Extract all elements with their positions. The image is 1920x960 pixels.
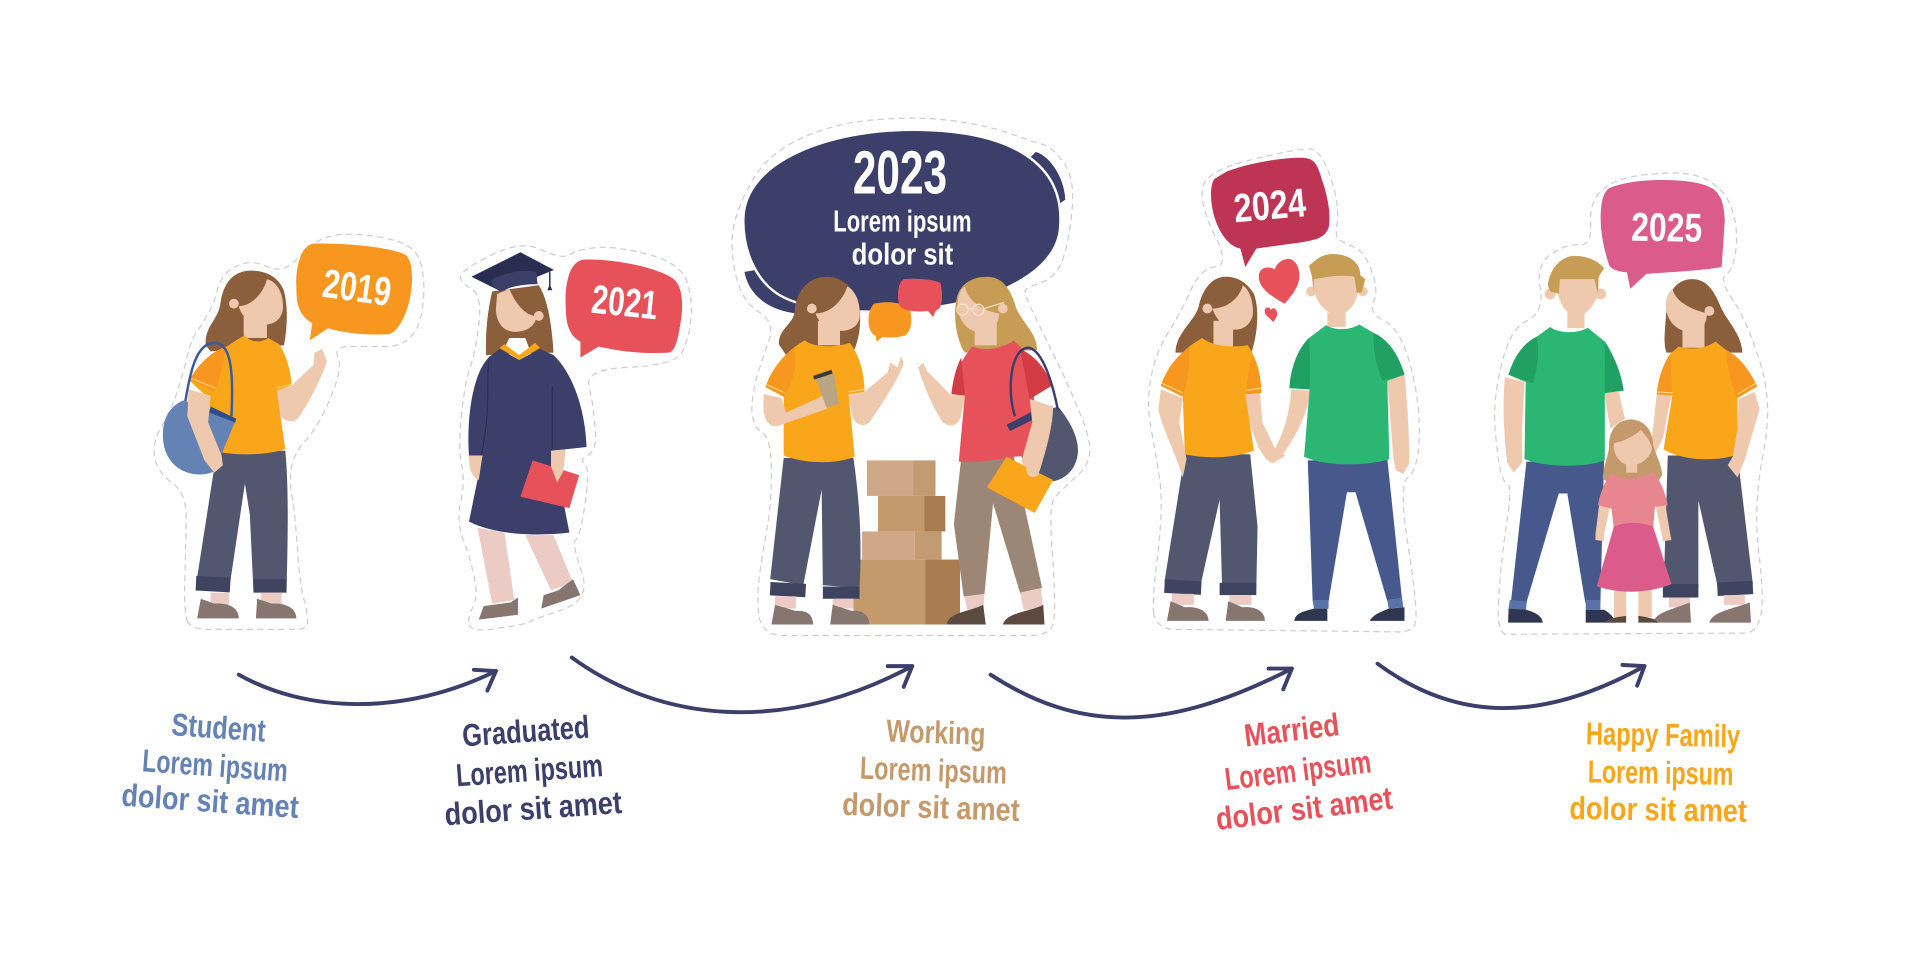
panel: 2021 graduated — [459, 246, 691, 630]
text block: happy family: dolor sit amet — [1569, 790, 1748, 829]
text block: student: Student — [170, 706, 267, 749]
text block: student: Lorem ipsum — [141, 742, 289, 788]
text block: married: Lorem ipsum — [1223, 743, 1373, 797]
text block: married: Married — [1242, 706, 1341, 754]
panel: 2024 married — [1149, 149, 1419, 632]
arrow: working to married — [991, 669, 1292, 718]
sticker outline — [154, 234, 424, 629]
graduation cap — [471, 252, 554, 291]
text block: graduated: Lorem ipsum — [455, 747, 604, 793]
arrow: student to graduated — [239, 670, 496, 704]
panel: 2019 student — [154, 234, 424, 629]
sticker outline — [459, 246, 691, 630]
text block: married: dolor sit amet — [1214, 780, 1395, 837]
speech bubble: 2023: dolor sit — [852, 237, 953, 271]
speech bubble: 2023: Lorem ipsum — [833, 204, 972, 238]
figure: daughter in pink dress — [1596, 419, 1671, 623]
text block: happy family: Happy Family — [1586, 715, 1741, 754]
stacked cardboard boxes — [853, 460, 960, 624]
figure: woman with coffee — [763, 277, 904, 624]
icon: hearts — [1259, 259, 1299, 322]
figure: mother — [1652, 279, 1760, 623]
text block: working: Lorem ipsum — [859, 750, 1007, 791]
text block: happy family — [1569, 715, 1748, 829]
figure: graduate in gown — [468, 252, 587, 620]
speech bubble: 2023 — [743, 130, 1065, 313]
arrow: married to happy family — [1378, 664, 1644, 708]
speech bubble: 2021: 2021 — [589, 276, 660, 328]
speech bubble: 2019: 2019 — [320, 260, 394, 315]
text block: graduated: Graduated — [461, 709, 591, 753]
arrow: graduated to working — [572, 658, 912, 712]
speech bubble: 2024: 2024 — [1232, 179, 1308, 231]
text block: graduated: dolor sit amet — [443, 784, 623, 832]
figure: student with bag — [163, 271, 327, 618]
small chat bubbles — [868, 279, 942, 342]
speech bubble: 2025 — [1601, 180, 1725, 289]
panel: 2025 happy family — [1495, 173, 1768, 634]
text block: working — [842, 713, 1021, 828]
text block: working: dolor sit amet — [842, 786, 1021, 828]
panel: 2023 working — [732, 118, 1090, 636]
figure: groom man — [1266, 254, 1409, 621]
text block: graduated — [443, 709, 623, 832]
sticker outline — [1495, 173, 1768, 634]
figure: father — [1504, 256, 1625, 623]
speech bubble: 2019 — [296, 243, 412, 340]
text block: working: Working — [886, 713, 986, 752]
speech bubble: 2025: 2025 — [1631, 204, 1703, 251]
text block: student: dolor sit amet — [120, 777, 300, 825]
speech bubble: 2024 — [1211, 158, 1330, 267]
figure: bride woman — [1158, 277, 1286, 621]
text block: happy family: Lorem ipsum — [1587, 753, 1734, 792]
speech bubble: 2021 — [566, 259, 682, 358]
sticker outline — [732, 118, 1090, 636]
figure: woman with glasses and folder — [916, 277, 1078, 624]
text block: student — [120, 706, 300, 825]
text block: married — [1214, 706, 1395, 837]
sticker outline — [1149, 149, 1419, 632]
speech bubble: 2023: 2023 — [853, 138, 947, 206]
